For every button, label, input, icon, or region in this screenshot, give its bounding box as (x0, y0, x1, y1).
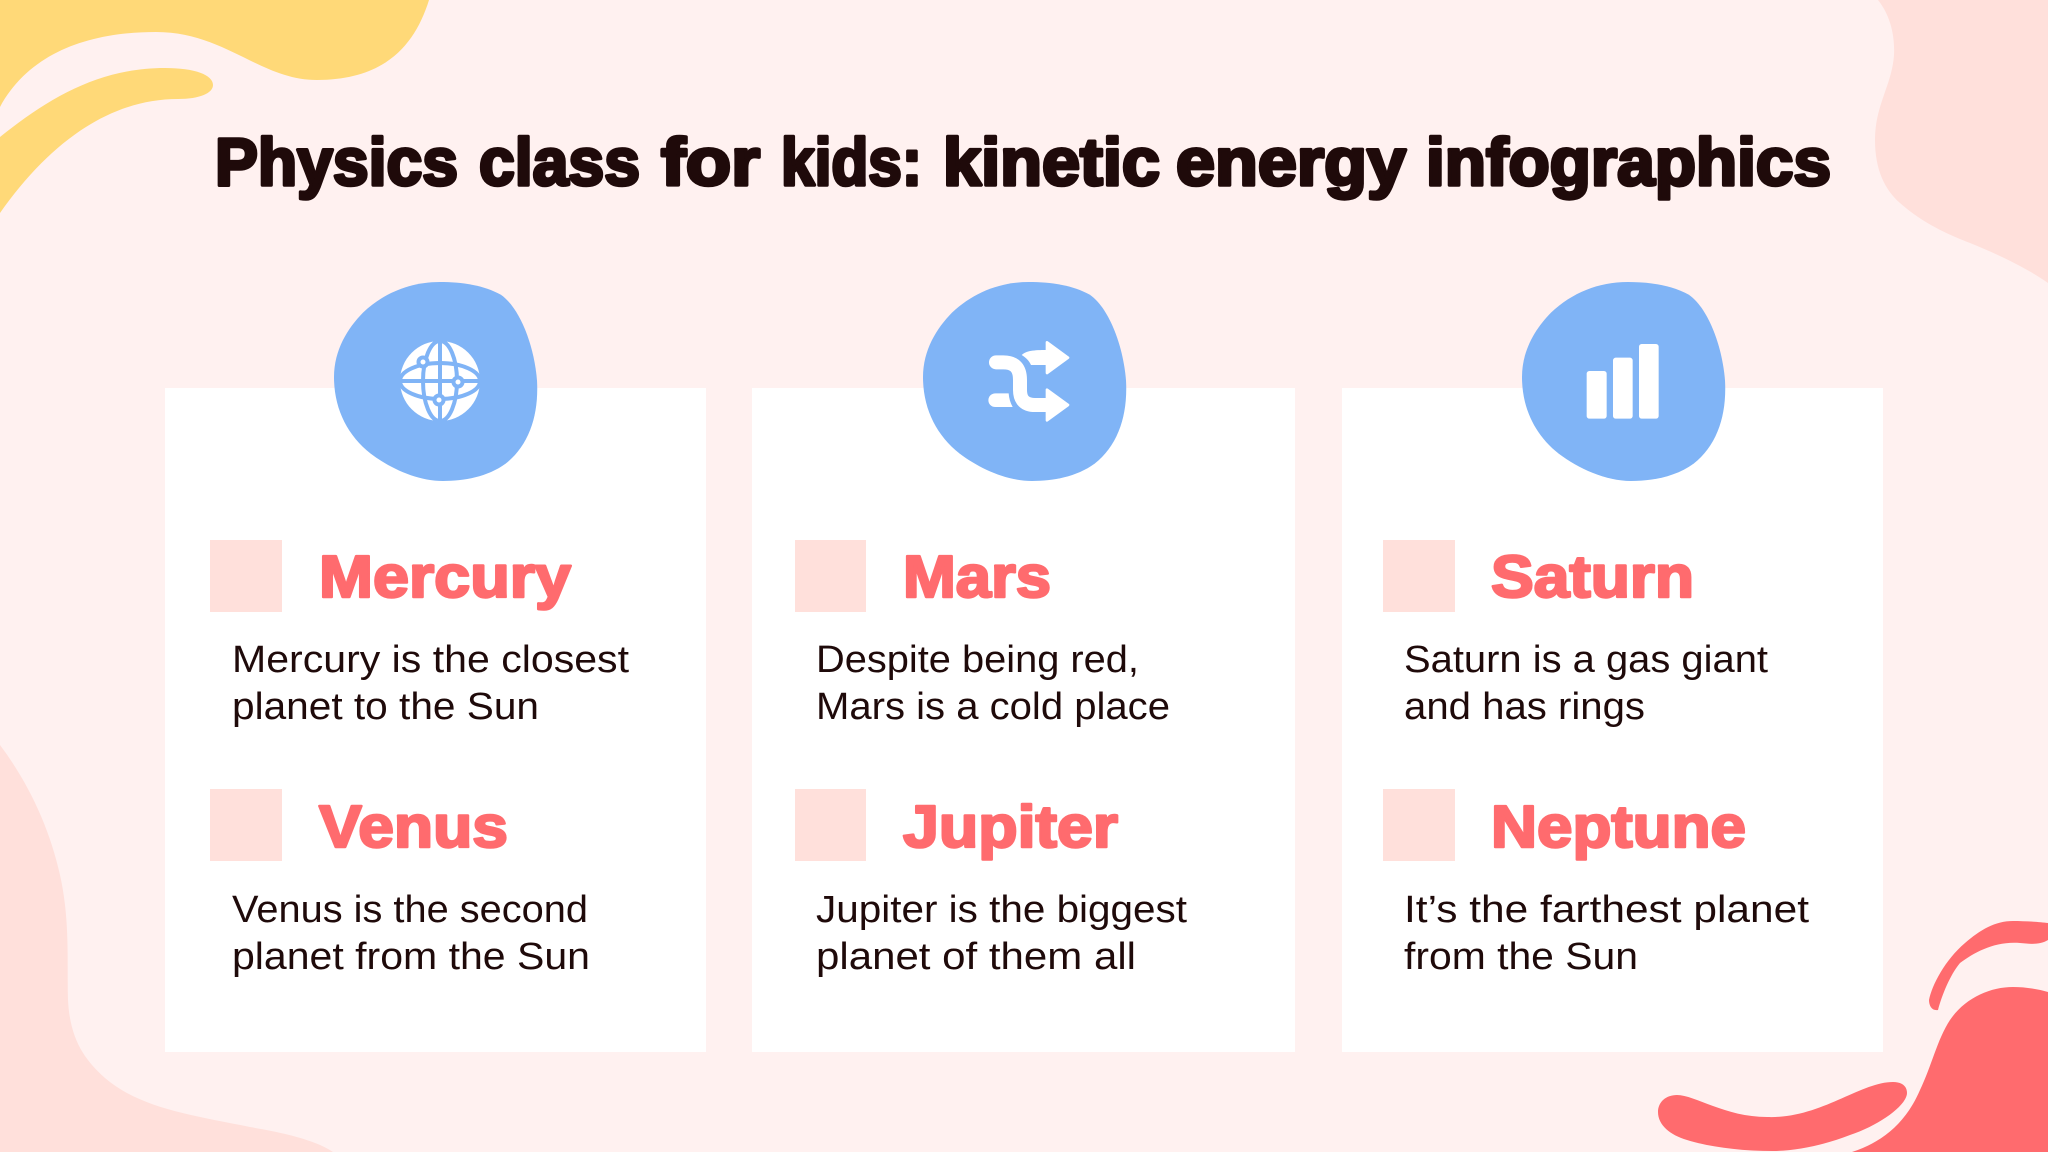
decoration: coral swoosh bottom right (1658, 1082, 1907, 1151)
panel: Saturn and Neptune (1342, 282, 1883, 1052)
text: Mars description: Despite being red, (816, 639, 1139, 681)
heading: Jupiter: Jupiter (903, 794, 1118, 860)
text: Venus description: Venus is the second (232, 889, 588, 931)
marker square: Mercury (210, 540, 282, 612)
title: Physics (215, 125, 458, 200)
title: energy (1176, 125, 1406, 200)
heading: Neptune: Neptune (1491, 794, 1746, 860)
text: Jupiter description (816, 889, 1187, 978)
title: kids: (781, 125, 922, 200)
marker square: Saturn (1383, 540, 1455, 612)
text: Mars description (816, 639, 1170, 728)
marker square: Jupiter (795, 789, 866, 861)
text: Mercury description: Mercury is the closest (232, 639, 629, 681)
text: Saturn description: Saturn is a gas giant (1404, 639, 1768, 681)
heading: Mercury: Mercury (319, 544, 571, 610)
decoration: pink blob bottom left (0, 745, 333, 1152)
text: Mars description: Mars is a cold place (816, 686, 1170, 728)
heading: Saturn: Saturn (1491, 544, 1694, 610)
marker square: Mars (795, 540, 866, 612)
text: Mercury description (232, 639, 629, 728)
text: Venus description (232, 889, 590, 978)
text: Neptune description (1404, 889, 1809, 978)
marker square: Venus (210, 789, 282, 861)
card background (752, 388, 1295, 1052)
card background (165, 388, 706, 1052)
text: Neptune description: from the Sun (1404, 936, 1638, 978)
text: Jupiter description: Jupiter is the biggest (816, 889, 1187, 931)
card background (1342, 388, 1883, 1052)
heading: Venus: Venus (319, 794, 508, 860)
decoration: pink blob top right (1875, 0, 2048, 283)
title: infographics (1426, 125, 1831, 200)
panel: Mars and Jupiter (752, 282, 1295, 1052)
text: Jupiter description: planet of them all (816, 936, 1136, 978)
decoration: yellow swoosh top left (0, 68, 213, 213)
title: class (479, 125, 640, 200)
icon: shuffle arrows (923, 282, 1126, 481)
heading: Mars: Mars (903, 544, 1051, 610)
title: kinetic (943, 125, 1160, 200)
text: Venus description: planet from the Sun (232, 936, 590, 978)
icon: globe (334, 282, 537, 481)
icon: bar chart (1522, 282, 1725, 481)
decoration: yellow blob top left (0, 0, 429, 107)
text: Neptune description: It’s the farthest planet (1404, 889, 1809, 931)
title: for (661, 125, 760, 200)
decoration: coral arc bottom right (1929, 921, 2048, 1010)
text: Saturn description: and has rings (1404, 686, 1645, 728)
panel: Mercury and Venus (165, 282, 706, 1052)
text: Saturn description (1404, 639, 1768, 728)
marker square: Neptune (1383, 789, 1455, 861)
title (215, 125, 1831, 200)
text: Mercury description: planet to the Sun (232, 686, 539, 728)
decoration: coral blob bottom right (1852, 987, 2048, 1152)
